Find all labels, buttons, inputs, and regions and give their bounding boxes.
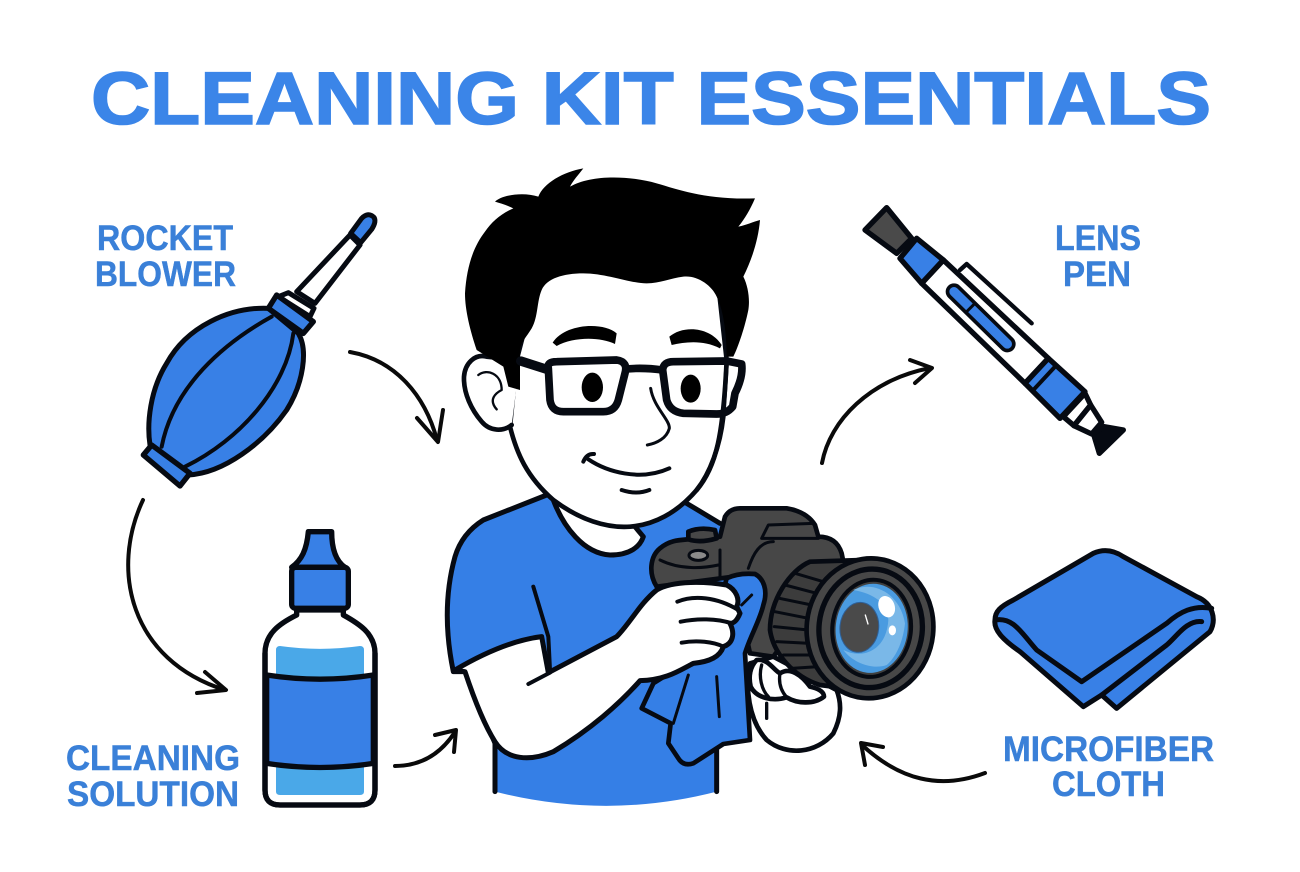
arm and upper hand (455, 582, 740, 758)
camera (651, 508, 940, 705)
icon: rocket blower (143, 215, 375, 486)
title: CLEANING KIT ESSENTIALS (91, 57, 1211, 140)
label: lens pen: LENS (1055, 219, 1141, 258)
icon: lens pen (865, 208, 1123, 453)
lower hand supporting camera (748, 657, 840, 751)
label: cleaning solution: SOLUTION (67, 775, 239, 814)
label: microfiber cloth (1003, 730, 1214, 804)
lens focus ring (770, 560, 863, 690)
icon: cleaning solution bottle (265, 532, 375, 805)
label: microfiber cloth: MICROFIBER (1003, 730, 1214, 769)
label: cleaning solution (66, 739, 240, 814)
label: rocket blower: BLOWER (95, 255, 236, 294)
label: rocket blower: ROCKET (97, 219, 233, 258)
hair (465, 168, 760, 390)
character: person cleaning camera (447, 168, 940, 806)
label: rocket blower (95, 219, 236, 294)
arrow: rocket blower to person (350, 352, 443, 442)
label: lens pen (1055, 219, 1141, 294)
label: lens pen: PEN (1063, 255, 1131, 294)
arrow: microfiber cloth to camera (861, 743, 985, 781)
character torso and shirt (447, 495, 750, 806)
label: microfiber cloth: CLOTH (1052, 765, 1165, 804)
eyebrows (553, 326, 722, 348)
icon: folded microfiber cloth (995, 551, 1213, 708)
lens barrel (800, 552, 940, 705)
lens glass (831, 580, 912, 677)
lower hand fingers (750, 660, 824, 702)
arrow: solution to person (395, 730, 456, 766)
glasses (521, 360, 742, 417)
character head (464, 168, 760, 527)
arrow: rocket blower to solution (128, 500, 226, 693)
nose (647, 388, 669, 445)
cleaning cloth in hand (642, 574, 765, 764)
smile (583, 454, 669, 492)
label: cleaning solution: CLEANING (66, 739, 240, 778)
arrow: person to lens pen (822, 360, 932, 463)
eyes (582, 373, 603, 402)
